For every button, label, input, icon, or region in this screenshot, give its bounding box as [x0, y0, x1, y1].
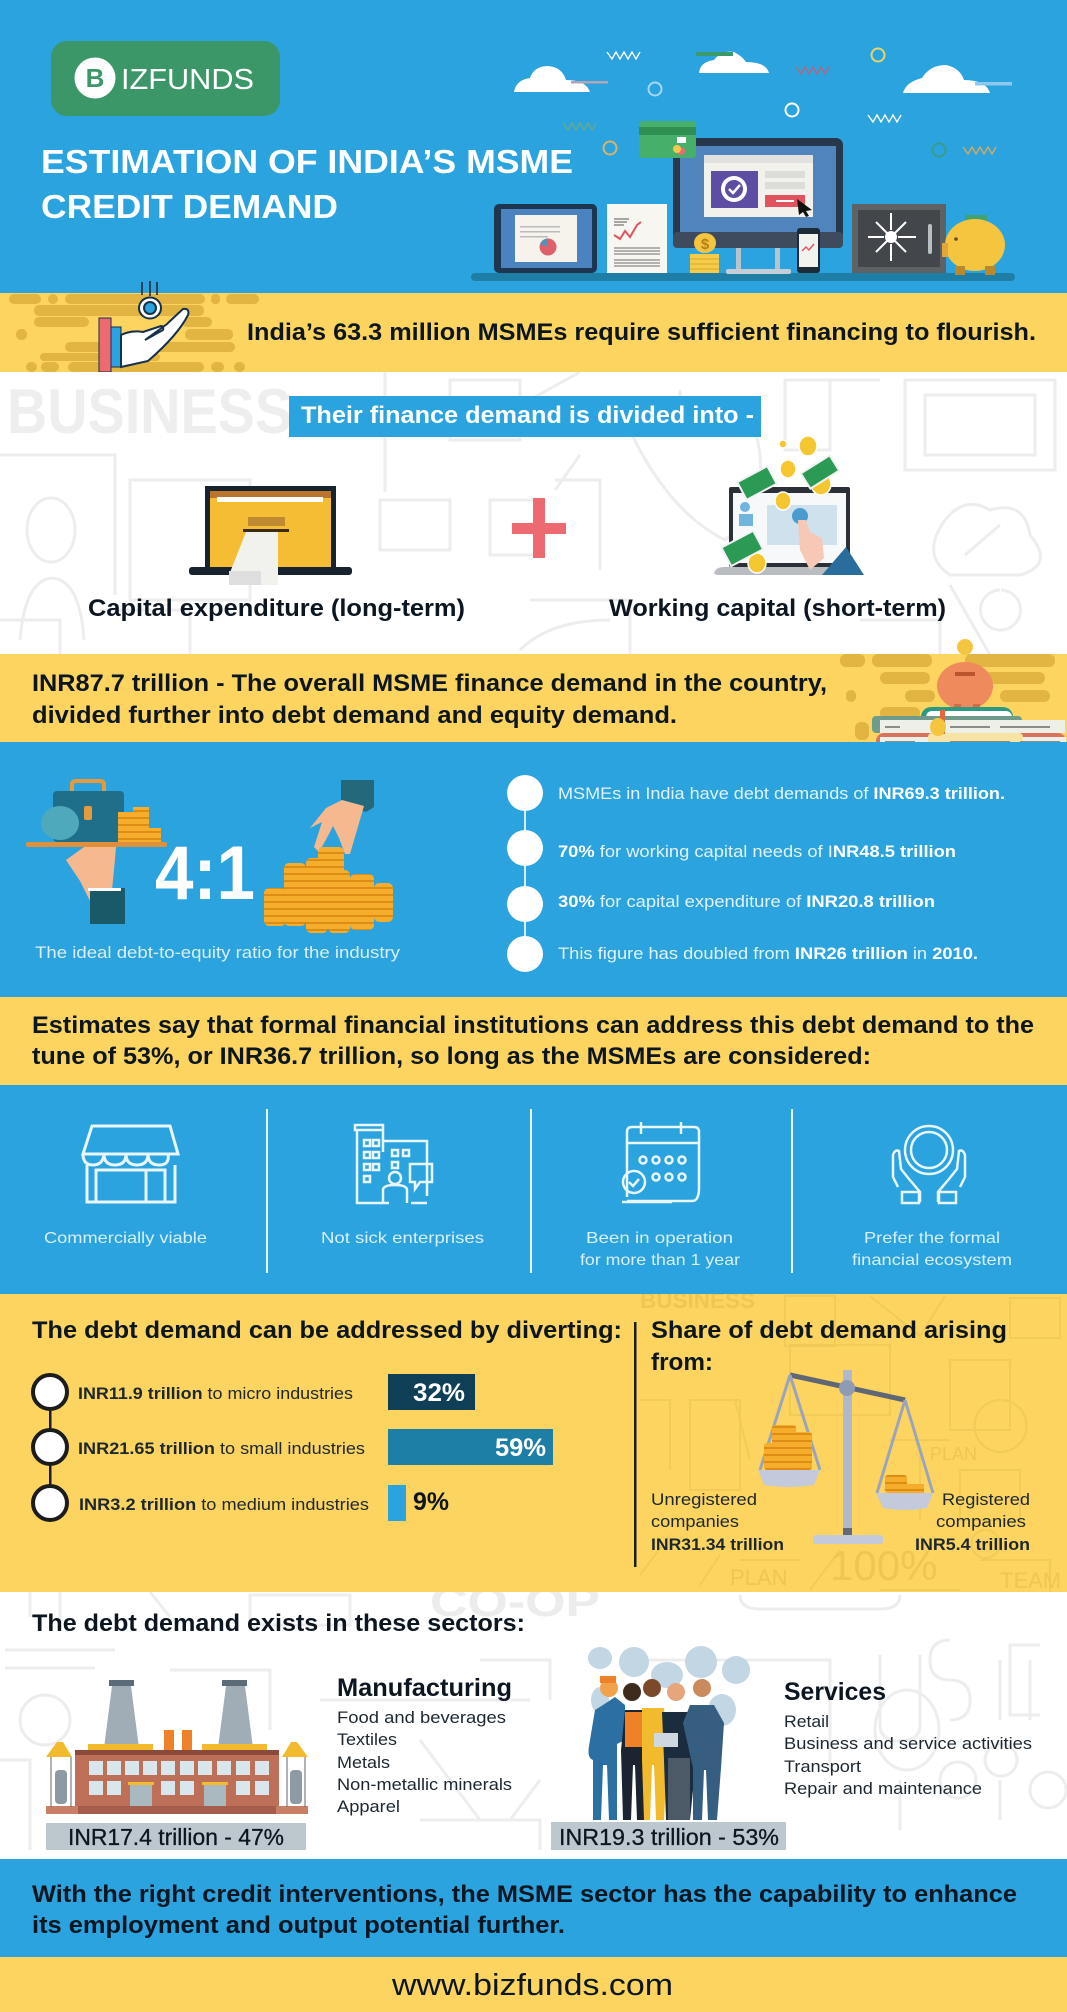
- heading: share: [651, 1317, 1007, 1376]
- text: services list: Repair and maintenance: [784, 1779, 982, 1798]
- decorative doodle background: [640, 1288, 1061, 1593]
- text: services list: Business and service activities: [784, 1734, 1032, 1753]
- panel: eligibility criteria: [0, 1085, 1067, 1294]
- title: CREDIT DEMAND: [41, 188, 338, 225]
- decorative doodle background: PLAN: [930, 1444, 977, 1464]
- text: been in operation: Been in operation: [586, 1230, 733, 1247]
- panel: footer website: [0, 1957, 1067, 2012]
- heading badge: [289, 396, 761, 437]
- text: overall demand: INR87.7 trillion - The overall MSME finance demand in the country,: [32, 670, 827, 697]
- heading: sectors: The debt demand exists in these sectors:: [32, 1610, 525, 1637]
- text: manufacturing list: Non-metallic minerals: [337, 1775, 512, 1794]
- decorative doodle background: PLAN: [730, 1565, 787, 1590]
- panel: footer website: www.bizfunds.com: [391, 1967, 673, 2002]
- logo: IZFUNDS: [121, 64, 254, 96]
- text: been in operation: for more than 1 year: [580, 1252, 741, 1269]
- icon: stacks of gold coins: [264, 847, 393, 933]
- timeline: debt demand facts: [507, 775, 1005, 972]
- panel: formal finance estimate banner: tune of 53%, or INR36.7 trillion, so long as the MSMEs are considered:: [32, 1043, 871, 1070]
- timeline: debt demand facts: 70% for working capital needs of I NR48.5 trillion: [558, 842, 956, 861]
- row: small industries: INR21.65 trillion to small industries: [78, 1439, 365, 1458]
- title: [41, 143, 573, 225]
- timeline: debt demand facts: This figure has doubled from INR26 trillion in 2010.: [558, 944, 978, 963]
- text: manufacturing list: [337, 1674, 512, 1816]
- row: small industries: 59%: [495, 1434, 546, 1462]
- icon: office building and person: [355, 1125, 432, 1203]
- decorative doodle background: TEAM: [1000, 1568, 1061, 1593]
- panel: formal finance estimate banner: [0, 997, 1067, 1085]
- panel: header: [0, 0, 1067, 293]
- icon: phone: [797, 228, 820, 273]
- figure: ratio: 4:1: [155, 831, 255, 916]
- icon: coin stack: $: [701, 236, 710, 253]
- icon: hands holding coin: [893, 1126, 965, 1203]
- decorative doodle background: [0, 372, 1055, 655]
- panel: diverting debt demand and share: [0, 1288, 1067, 1593]
- heading: diverting: The debt demand can be addressed by diverting:: [32, 1317, 622, 1344]
- text: prefer the formal: [852, 1230, 1012, 1269]
- icon: hand receiving coin: [99, 281, 188, 372]
- timeline: debt demand facts: 30% for capital expenditure of INR20.8 trillion: [558, 892, 935, 911]
- timeline markers: [33, 1375, 67, 1520]
- text: prefer the formal: financial ecosystem: [852, 1252, 1012, 1269]
- panel: closing statement: With the right credit interventions, the MSME sector has the capability to enhance: [32, 1881, 1017, 1908]
- text: manufacturing list: Metals: [337, 1753, 390, 1772]
- labels: registered companies: companies: [936, 1512, 1026, 1531]
- decorative doodle background: [0, 1578, 1066, 1850]
- panel: closing statement: its employment and output potential further.: [32, 1912, 565, 1939]
- labels: unregistered companies: INR31.34 trillion: [651, 1535, 784, 1554]
- icon: piggy bank on books: [872, 639, 1066, 752]
- decorative doodle background: CO-OP: [430, 1578, 600, 1625]
- icon: tablet: [494, 204, 597, 273]
- timeline: debt demand facts: MSMEs in India have debt demands of INR69.3 trillion.: [558, 784, 1005, 803]
- text: services list: [784, 1678, 1032, 1798]
- text: services list: Transport: [784, 1757, 861, 1776]
- text: overall demand: [32, 670, 827, 729]
- row: medium industries: 9%: [413, 1488, 449, 1516]
- logo: [51, 41, 280, 116]
- decorative doodle background: BUSINESS: [7, 377, 292, 447]
- labels: registered companies: INR5.4 trillion: [915, 1535, 1030, 1554]
- panel: overall demand banner: [0, 639, 1067, 752]
- icon: hand picking coin: [310, 780, 374, 854]
- text: services list: Services: [784, 1678, 886, 1706]
- label: manufacturing value: INR17.4 trillion - 47%: [68, 1824, 284, 1850]
- caption: ideal ratio: The ideal debt-to-equity ratio for the industry: [35, 943, 401, 962]
- label: services value: INR19.3 trillion - 53%: [559, 1824, 779, 1850]
- icon: credit card: [639, 121, 696, 158]
- labels: unregistered companies: Unregistered: [651, 1490, 757, 1509]
- text: manufacturing list: Food and beverages: [337, 1708, 506, 1727]
- panel: MSME financing banner: [0, 281, 1067, 372]
- icon: laptop with money and coins: [714, 436, 864, 575]
- row: small industries: [78, 1429, 553, 1465]
- decorative doodle background: BUSINESS: [640, 1288, 755, 1313]
- icon: balance scale with coins: [758, 1370, 933, 1544]
- labels: unregistered companies: [651, 1490, 784, 1554]
- labels: registered companies: [915, 1490, 1030, 1554]
- panel: sectors: [0, 1578, 1067, 1859]
- heading: share: from:: [651, 1349, 713, 1376]
- icon: group of workers: [588, 1646, 750, 1820]
- icon: document with chart: [607, 204, 667, 273]
- text: manufacturing list: Textiles: [337, 1730, 397, 1749]
- row: micro industries: INR11.9 trillion to micro industries: [78, 1384, 353, 1403]
- text: working capital: Working capital (short-term): [609, 595, 946, 622]
- icon: safe: [852, 204, 946, 273]
- panel: formal finance estimate banner: Estimates say that formal financial institutions can address this debt demand to the: [32, 1012, 1034, 1039]
- row: micro industries: [78, 1374, 475, 1410]
- logo: B: [86, 63, 104, 93]
- text: not sick enterprises: Not sick enterprises: [321, 1230, 484, 1247]
- labels: unregistered companies: companies: [651, 1512, 739, 1531]
- labels: registered companies: Registered: [942, 1490, 1030, 1509]
- clouds and decorative marks: [514, 48, 1012, 156]
- icon: piggy bank: [942, 215, 1005, 275]
- icon: monitor: [673, 138, 843, 274]
- text: prefer the formal: Prefer the formal: [864, 1230, 1000, 1247]
- illustration: desk with devices: [471, 121, 1015, 281]
- row: medium industries: [79, 1485, 449, 1521]
- icon: coin stack: [690, 233, 719, 273]
- decorative doodle background: 100%: [830, 1542, 937, 1589]
- text: commercially viable: Commercially viable: [44, 1230, 207, 1247]
- text: manufacturing list: Manufacturing: [337, 1674, 512, 1702]
- text: capital expenditure: Capital expenditure (long-term): [88, 595, 465, 622]
- text: manufacturing list: Apparel: [337, 1797, 400, 1816]
- text: been in operation: [580, 1230, 741, 1269]
- text: MSME financing statement: India’s 63.3 million MSMEs require sufficient financing to flourish.: [247, 319, 1036, 346]
- panel: closing statement: [0, 1859, 1067, 1957]
- panel: finance demand split: [0, 372, 1067, 655]
- icon: hand holding tray with briefcase: [26, 781, 167, 924]
- text: services list: Retail: [784, 1712, 829, 1731]
- row: micro industries: 32%: [413, 1379, 465, 1407]
- heading: share: Share of debt demand arising: [651, 1317, 1007, 1344]
- text: overall demand: divided further into debt demand and equity demand.: [32, 702, 677, 729]
- row: medium industries: INR3.2 trillion to medium industries: [79, 1495, 369, 1514]
- icon: plus sign: [512, 498, 566, 558]
- panel: debt to equity and debt demand: [0, 742, 1067, 997]
- icon: calendar with check: [622, 1122, 699, 1202]
- icon: laptop with receipt: [189, 486, 352, 585]
- icon: factory: [46, 1680, 308, 1814]
- icon: storefront: [83, 1126, 178, 1202]
- heading badge: Their finance demand is divided into -: [301, 402, 754, 429]
- title: ESTIMATION OF INDIA’S MSME: [41, 143, 573, 180]
